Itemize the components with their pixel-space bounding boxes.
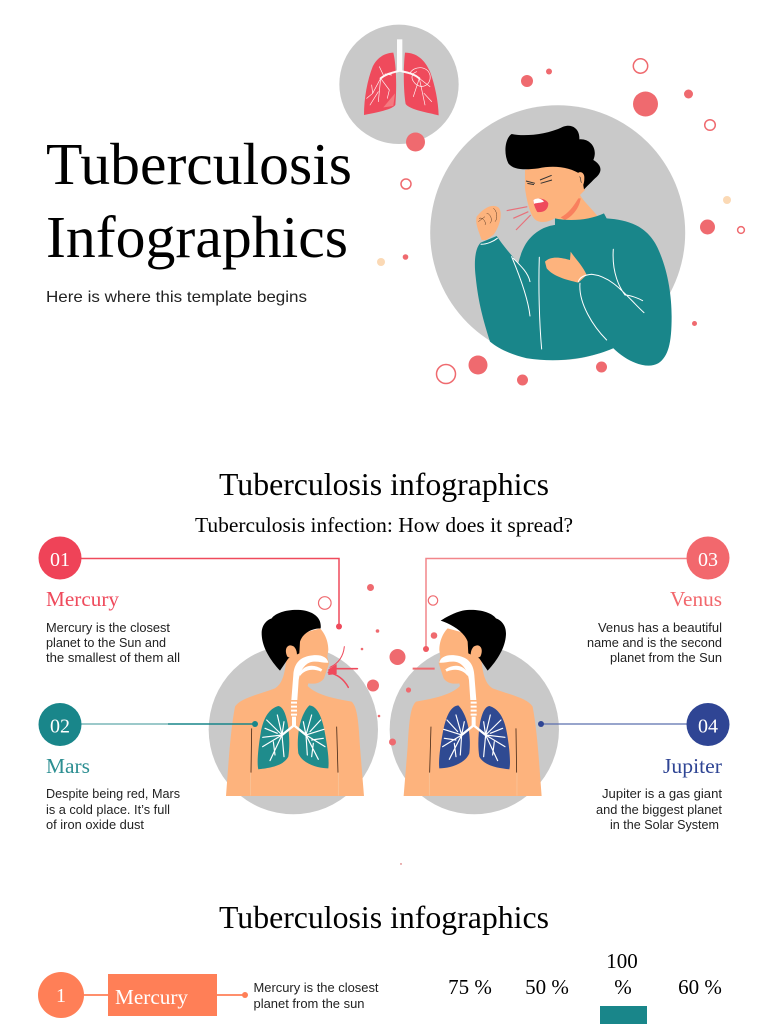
callout 04 Jupiter [538, 703, 730, 832]
percent labels: 50 % [525, 975, 569, 999]
callout 02 Mars [38, 703, 258, 832]
percent labels: 60 % [678, 975, 722, 999]
percent labels: 100 [606, 949, 638, 973]
bar [600, 1006, 647, 1024]
callout 01 Mercury [38, 536, 342, 665]
callout 01 Mercury: Mercury is the closest [46, 621, 171, 635]
title: Infographics [46, 204, 348, 270]
percent labels: % [614, 975, 632, 999]
callout 02 Mars: 02 [50, 716, 70, 738]
illustration: right person with blue lungs [390, 610, 559, 814]
exhaled arrows [328, 647, 357, 687]
icon: lungs in circle [339, 25, 459, 144]
chest hand [545, 252, 587, 283]
callout 02 Mars: Despite being red, Mars [46, 787, 180, 801]
illustration: coughing man [430, 105, 685, 366]
head [505, 126, 600, 230]
callout 02 Mars: is a cold place. It’s full [46, 803, 170, 817]
callout 02 Mars: of iron oxide dust [46, 818, 145, 832]
callout 04 Jupiter: 04 [698, 716, 718, 738]
list item 1 Mercury [38, 972, 379, 1018]
callout 03 Venus: name and is the second [587, 636, 722, 650]
list item 1 Mercury: Mercury [115, 985, 188, 1009]
callout 04 Jupiter: in the Solar System [610, 818, 719, 832]
percent labels: 75 % [448, 975, 492, 999]
title: Tuberculosis [46, 131, 352, 197]
callout 02 Mars: Mars [46, 754, 90, 778]
heading: section 2: Tuberculosis infographics [219, 467, 549, 502]
list item 1 Mercury: planet from the sun [254, 997, 365, 1011]
sweater folds [481, 238, 644, 349]
callout 03 Venus: planet from the Sun [610, 651, 722, 665]
decorative droplets around the coughing figure [377, 59, 744, 386]
callout 01 Mercury: Mercury [46, 587, 119, 611]
percent labels [448, 949, 722, 999]
callout 01 Mercury: 01 [50, 549, 70, 571]
list item 1 Mercury: Mercury is the closest [254, 981, 379, 995]
list item 1 Mercury: 1 [56, 985, 66, 1007]
droplets between the two people [318, 584, 438, 746]
sweater [475, 213, 672, 366]
callout 03 Venus [423, 536, 730, 665]
callout 03 Venus: Venus [670, 587, 722, 611]
callout 01 Mercury: the smallest of them all [46, 651, 180, 665]
title [46, 131, 352, 270]
subheading: Tuberculosis infection: How does it spread? [195, 513, 573, 537]
callout 04 Jupiter: and the biggest planet [596, 803, 723, 817]
callout 04 Jupiter: Jupiter [663, 754, 722, 778]
callout 03 Venus: Venus has a beautiful [598, 621, 722, 635]
callout 01 Mercury: planet to the Sun and [46, 636, 166, 650]
subtitle: Here is where this template begins [46, 289, 307, 306]
illustration: left person with teal lungs [209, 610, 378, 814]
fist [476, 206, 501, 240]
callout 04 Jupiter: Jupiter is a gas giant [602, 787, 723, 801]
heading: section 3: Tuberculosis infographics [219, 900, 549, 935]
callout 03 Venus: 03 [698, 549, 718, 571]
